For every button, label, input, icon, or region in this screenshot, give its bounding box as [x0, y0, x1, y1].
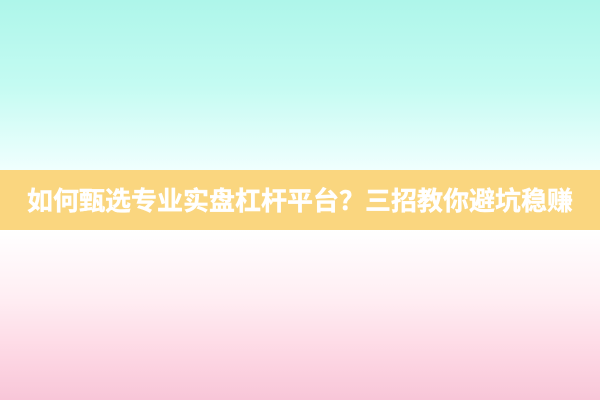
title: 如何甄选专业实盘杠杆平台？三招教你避坑稳赚	[27, 186, 573, 216]
panel: bottom pink gradient background	[0, 230, 600, 400]
panel: yellow title band	[0, 170, 600, 230]
panel: top cyan gradient background	[0, 0, 600, 170]
